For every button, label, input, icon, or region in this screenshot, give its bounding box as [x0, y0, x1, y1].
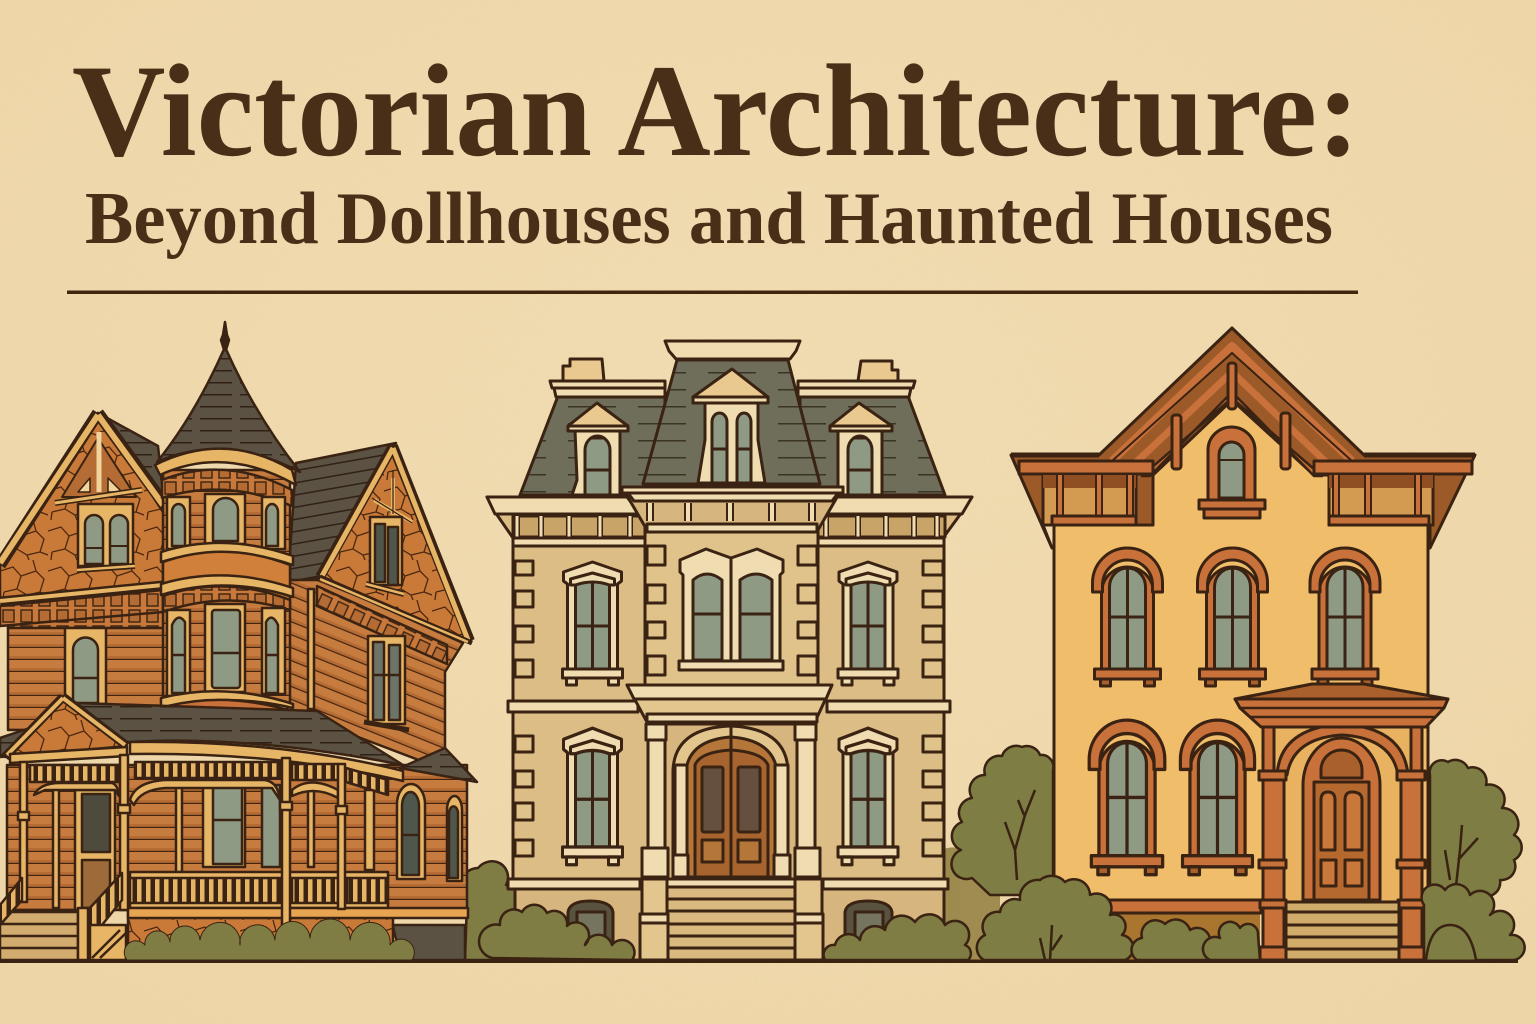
second floor left window [1092, 548, 1162, 686]
right porch column [1397, 771, 1425, 960]
house: Italianate [1011, 328, 1475, 960]
wall body [513, 530, 944, 880]
left chimney [563, 359, 604, 381]
recess wall [1274, 724, 1411, 904]
turret finial [221, 322, 229, 350]
house: Queen Anne [0, 322, 477, 960]
mid-storey belt course [508, 701, 950, 712]
base band [1099, 900, 1261, 913]
front door [53, 785, 115, 910]
left dormer [568, 403, 628, 495]
Italianate garden: trees and shrubs [951, 746, 1525, 960]
middle shrub [1131, 920, 1210, 960]
left shrubs [479, 905, 634, 960]
front steps [667, 879, 796, 960]
double doors [695, 726, 768, 877]
left tree [951, 746, 1053, 895]
gable eaves [1011, 328, 1475, 548]
upper right window [838, 562, 898, 685]
turret conical roof [157, 347, 300, 472]
portico small pillars [673, 765, 790, 877]
porch upper posts [1263, 724, 1422, 772]
left wall window [65, 628, 106, 704]
small shrub [1203, 922, 1260, 960]
left mansard roof [520, 396, 665, 495]
subtitle: Beyond Dollhouses and Haunted Houses [85, 178, 1333, 260]
stucco walls [1054, 392, 1428, 905]
main right roof [288, 443, 396, 582]
second floor right window [1310, 548, 1380, 686]
porch centre window [176, 777, 374, 872]
house: Second Empire [479, 341, 972, 960]
right bay windows [397, 784, 462, 881]
left large shrub [977, 876, 1133, 960]
centre cornice [622, 487, 843, 532]
front stairs with rails [0, 873, 126, 960]
left main cornice [487, 497, 645, 546]
second floor centre window [1198, 548, 1268, 686]
round turret [155, 322, 300, 714]
right mansard roof [800, 396, 945, 495]
right column [795, 724, 820, 877]
first floor right window [1180, 720, 1255, 875]
wraparound porch wall [7, 765, 467, 910]
door arch [1303, 738, 1380, 900]
porch roof [77, 703, 403, 765]
ground line [0, 960, 1518, 963]
porch arch [1277, 724, 1408, 775]
step piers [640, 879, 823, 960]
first floor left window [1089, 720, 1165, 875]
quoins [515, 546, 943, 856]
door surround arch [673, 726, 788, 877]
basement windows [568, 901, 892, 950]
foundation shrubs [124, 919, 414, 960]
portico entablature [627, 685, 832, 724]
far right lower roof [400, 748, 477, 782]
title divider [67, 290, 1358, 294]
turret walls [163, 470, 290, 705]
right roof cornice [798, 381, 915, 397]
left roof cornice [550, 381, 665, 397]
centre mansard roof [643, 360, 820, 484]
tower cap [665, 341, 800, 359]
title: Victorian Architecture: [72, 37, 1360, 184]
right bracket frieze [1329, 475, 1433, 525]
entry porch [1235, 684, 1448, 960]
right tree [1430, 760, 1522, 896]
portico recess [660, 724, 800, 879]
right side wall [287, 580, 463, 770]
turret lower windows [167, 604, 285, 696]
right shrub [1422, 884, 1525, 960]
left column [642, 724, 668, 877]
right gable [320, 446, 472, 643]
right chimney [858, 361, 898, 381]
lower right window [838, 728, 898, 865]
entry steps [1286, 902, 1399, 960]
back roof behind left gable [98, 413, 166, 520]
lower left window [562, 728, 622, 865]
right main cornice [818, 497, 972, 546]
right dormer [830, 403, 892, 495]
background trees and shrubs [460, 847, 1000, 960]
centre double window [679, 549, 783, 670]
porch railing [130, 872, 388, 908]
portico [627, 685, 832, 879]
porch roof [1235, 684, 1448, 699]
upper left window [562, 562, 622, 685]
centre dormer [693, 369, 768, 483]
porch columns [18, 755, 347, 948]
foundation [1100, 912, 1260, 960]
right shrubs [824, 914, 971, 960]
left wall [8, 600, 164, 730]
left porch column [1259, 771, 1286, 960]
door transom [1321, 750, 1362, 778]
porch entablature and spindle frieze [10, 742, 403, 805]
left bracket frieze [1043, 475, 1136, 525]
hanging gable posts [1172, 363, 1290, 469]
porch deck and stone foundation [128, 908, 468, 960]
right wall window [364, 636, 409, 730]
attic window [1199, 427, 1265, 518]
base belt course [508, 879, 948, 889]
turret belly bands [161, 543, 293, 565]
porch gable [5, 697, 127, 757]
double door [1314, 782, 1369, 900]
left gable [0, 413, 165, 626]
turret upper windows [167, 494, 285, 549]
basement storey [515, 889, 944, 960]
